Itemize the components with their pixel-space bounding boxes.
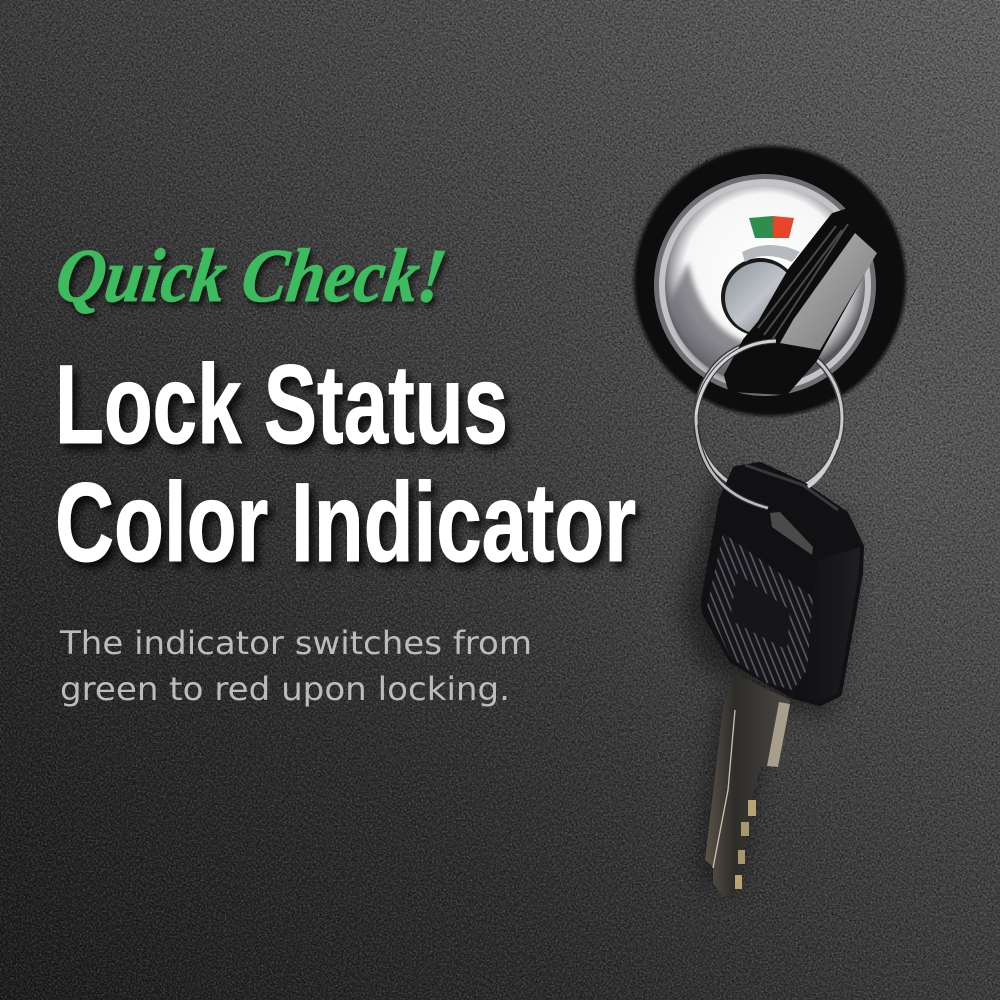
fob hatch texture <box>707 533 813 690</box>
fob side panel <box>800 547 860 702</box>
heading: Lock Status Color Indicator <box>55 342 636 585</box>
key shadow on panel <box>680 475 855 890</box>
key cylinder <box>721 258 799 336</box>
lock recess: black ring <box>634 146 906 416</box>
fob center label <box>730 573 790 650</box>
heading: Lock Status Color Indicator: Lock Status <box>55 342 508 467</box>
lock cylinder assembly <box>634 146 906 416</box>
description text: green to red upon locking. <box>60 670 510 708</box>
heading: Lock Status Color Indicator: Color Indicator <box>55 460 636 585</box>
blade notches <box>748 800 756 816</box>
eyebrow: Quick Check: Quick Check! <box>51 233 451 318</box>
cap ridges <box>758 224 848 340</box>
description text: The indicator switches from <box>59 624 532 662</box>
chrome lock plate <box>654 174 876 396</box>
key ring: front arc <box>696 341 776 415</box>
key ring: loop through fob <box>696 425 838 508</box>
description text <box>59 624 532 708</box>
indicator: green half <box>749 216 773 238</box>
key ring: full loop <box>696 341 842 495</box>
blade edge strip <box>767 702 790 767</box>
cap highlight face <box>780 233 877 350</box>
key cap inserted in lock <box>726 206 886 393</box>
fob hole <box>770 512 813 555</box>
indicator: red half <box>773 216 794 238</box>
key fob <box>705 465 860 702</box>
fob top highlight <box>745 465 838 510</box>
key blade <box>705 673 790 897</box>
